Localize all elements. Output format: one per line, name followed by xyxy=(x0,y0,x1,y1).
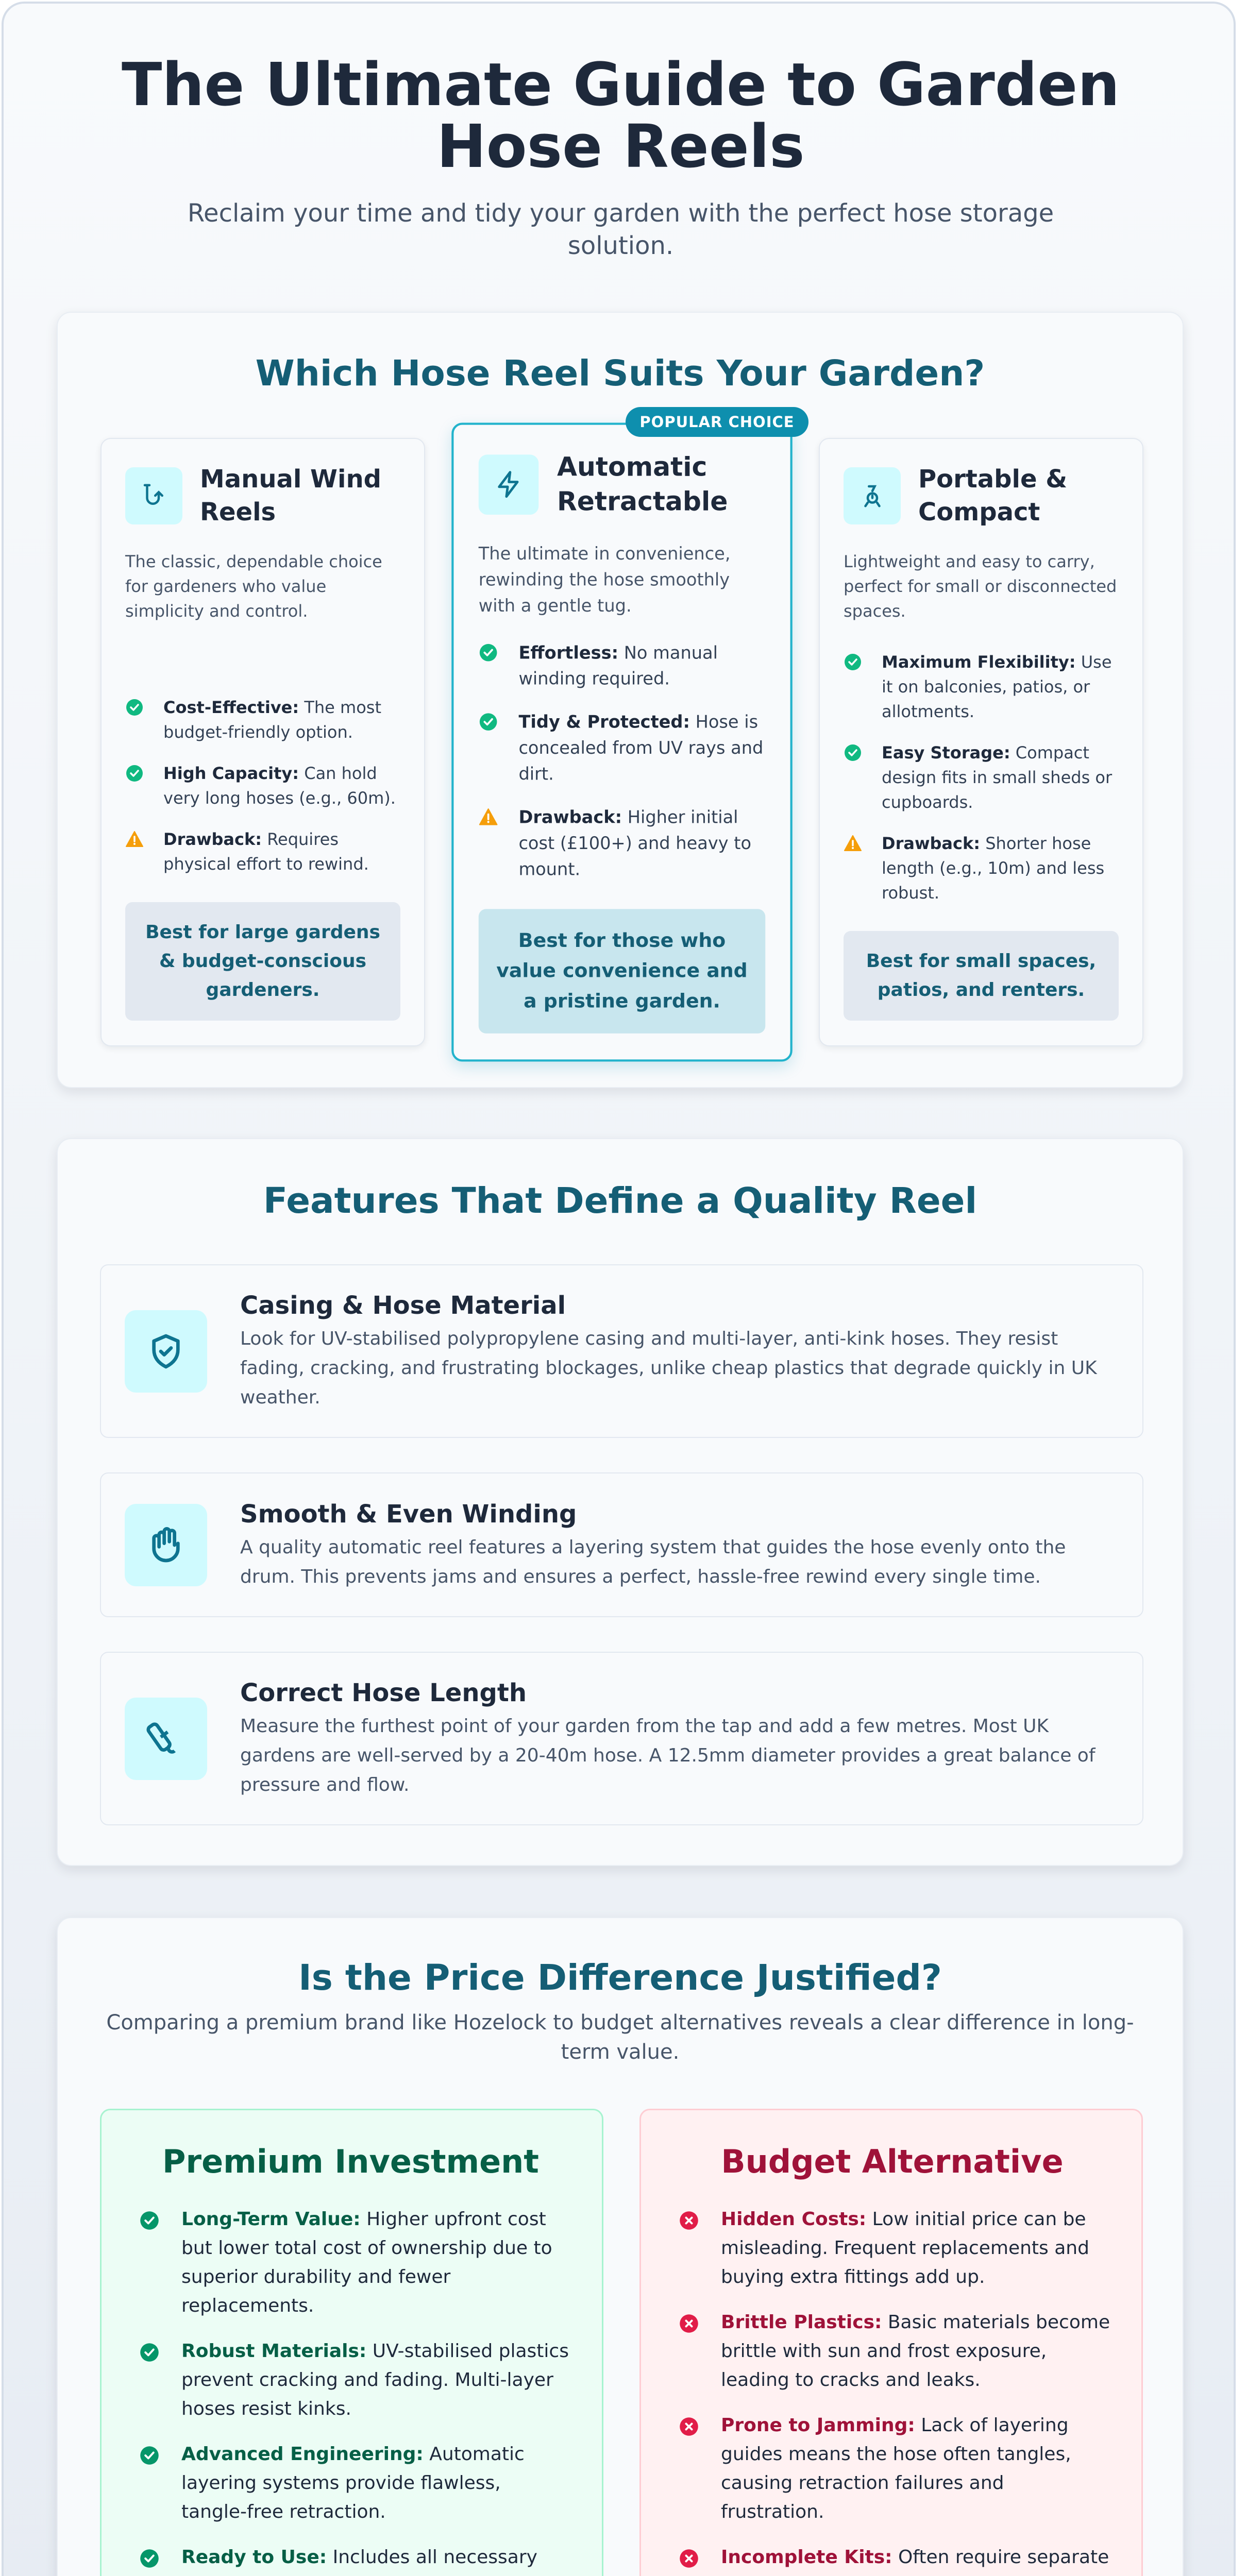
list: automatic pros/cons: Effortless: No manual winding required. xyxy=(518,642,718,689)
card header: manual: Reels xyxy=(200,498,276,527)
list: portable pros/cons: Easy Storage: Compact design fits in small sheds or cupboards. xyxy=(882,743,1112,812)
list: budget: Brittle Plastics: Basic materials become brittle with sun and frost exposure, leading to cracks and leaks. xyxy=(721,2312,1110,2391)
description: portable: Lightweight and easy to carry, perfect for small or disconnected spaces. xyxy=(844,552,1117,621)
icon: lightning xyxy=(479,454,538,514)
list: automatic pros/cons: Drawback: Higher initial cost (£100+) and heavy to mount. xyxy=(518,807,751,879)
list: budget: Hidden Costs: Low initial price can be misleading. Frequent replacements and buying extra fittings add up. xyxy=(721,2209,1089,2287)
description: automatic: The ultimate in convenience, rewinding the hose smoothly with a gentle tug. xyxy=(479,544,731,616)
list: automatic pros/cons xyxy=(479,642,763,879)
title: Hose Reels xyxy=(436,112,805,181)
subtitle: price: term value. xyxy=(561,2040,679,2064)
panel: price comparison xyxy=(57,1917,1184,2576)
callout: best for automatic xyxy=(479,909,765,1033)
callout: best for portable: Best for small spaces, patios, and renters. xyxy=(866,951,1096,1001)
card header: automatic: Retractable xyxy=(557,486,728,517)
subtitle: price xyxy=(106,2011,1134,2064)
feature: hose length: Correct Hose Length xyxy=(240,1679,527,1707)
description: manual: The classic, dependable choice for gardeners who value simplicity and control. xyxy=(125,552,382,621)
card header: automatic xyxy=(478,452,728,517)
card header: portable xyxy=(844,465,1067,527)
card header: automatic: Automatic xyxy=(557,452,707,482)
list: portable pros/cons xyxy=(844,652,1112,903)
list: manual pros/cons: Drawback: Requires physical effort to rewind. xyxy=(163,829,369,874)
list: manual pros/cons xyxy=(126,698,396,874)
card header: portable: Compact xyxy=(918,498,1040,527)
list: premium: Long-Term Value: Higher upfront cost but lower total cost of ownership due to superior durability and fewer replacements. xyxy=(181,2209,552,2316)
icon: hand xyxy=(125,1503,207,1586)
card header: manual xyxy=(125,465,381,527)
icon: tape xyxy=(125,1697,207,1780)
icon: portable xyxy=(844,467,901,524)
list: portable pros/cons: Drawback: Shorter hose length (e.g., 10m) and less robust. xyxy=(882,834,1104,903)
panel: which hose reel xyxy=(57,312,1184,1088)
subtitle: solution. xyxy=(568,231,673,260)
box: budget alternative xyxy=(639,2109,1143,2576)
subtitle: Reclaim your time and tidy your garden with the perfect hose storage xyxy=(188,199,1054,228)
list: portable pros/cons: Maximum Flexibility: Use it on balconies, patios, or allotments. xyxy=(882,652,1112,721)
feature: hose length: Measure the furthest point of your garden from the tap and add a few metres. Most UK gardens are well-served by a 20-40m hose. A 12.5mm diameter provides a great balance of pressure and flow. xyxy=(240,1716,1096,1795)
card: automatic retractable xyxy=(451,422,793,1062)
callout: best for manual: Best for large gardens & budget-conscious gardeners. xyxy=(145,922,380,1001)
list: premium: Robust Materials: UV-stabilised plastics prevent cracking and fading. Multi-layer hoses resist kinks. xyxy=(181,2341,569,2419)
list: premium xyxy=(140,2209,569,2576)
callout: best for manual xyxy=(125,902,400,1021)
list: manual pros/cons: High Capacity: Can hold very long hoses (e.g., 60m). xyxy=(163,764,396,808)
heading: price: Is the Price Difference Justified? xyxy=(298,1957,942,1998)
box: premium investment: Premium Investment xyxy=(162,2143,539,2180)
list: premium: Advanced Engineering: Automatic layering systems provide flawless, tangle-free retraction. xyxy=(181,2444,525,2522)
card header: manual: Manual Wind xyxy=(200,465,381,494)
list: manual pros/cons: Cost-Effective: The most budget-friendly option. xyxy=(163,698,381,742)
card header: portable: Portable & xyxy=(918,465,1067,494)
title xyxy=(122,50,1120,181)
icon: shield xyxy=(125,1310,207,1392)
card: manual wind reels xyxy=(100,438,425,1046)
badge: popular choice xyxy=(626,407,808,437)
feature: casing & hose material: Look for UV-stabilised polypropylene casing and multi-layer, anti-kink hoses. They resist fading, cracking, and frustrating blockages, unlike cheap plastics that degrade quickly in UK weather. xyxy=(240,1328,1097,1408)
feature: casing & hose material: Casing & Hose Material xyxy=(240,1291,566,1320)
panel: features xyxy=(57,1138,1184,1866)
title: The Ultimate Guide to Garden xyxy=(122,50,1120,120)
feature: hose length xyxy=(100,1652,1143,1825)
list: automatic pros/cons: Tidy & Protected: Hose is concealed from UV rays and dirt. xyxy=(518,711,763,784)
subtitle: price: Comparing a premium brand like Hozelock to budget alternatives reveals a clear difference in long- xyxy=(106,2011,1134,2035)
badge: popular choice: POPULAR CHOICE xyxy=(639,413,795,431)
heading: features: Features That Define a Quality Reel xyxy=(263,1180,977,1222)
callout: best for portable xyxy=(844,931,1119,1021)
heading: which hose reel: Which Hose Reel Suits Your Garden? xyxy=(256,353,985,394)
feature: casing & hose material xyxy=(100,1264,1143,1438)
box: budget alternative: Budget Alternative xyxy=(721,2143,1064,2180)
subtitle xyxy=(188,199,1054,260)
callout: best for automatic: Best for those who value convenience and a pristine garden. xyxy=(496,929,748,1012)
list: budget xyxy=(680,2209,1110,2576)
card: portable & compact xyxy=(819,438,1143,1046)
list: budget: Prone to Jamming: Lack of layering guides means the hose often tangles, causing retraction failures and frustration. xyxy=(721,2415,1071,2522)
feature: smooth winding xyxy=(100,1472,1143,1617)
feature: smooth winding: Smooth & Even Winding xyxy=(240,1499,577,1528)
icon: reel xyxy=(125,467,182,524)
box: premium investment xyxy=(100,2109,603,2576)
feature: smooth winding: A quality automatic reel features a layering system that guides the hose evenly onto the drum. This prevents jams and ensures a perfect, hassle-free rewind every single time. xyxy=(240,1536,1066,1587)
